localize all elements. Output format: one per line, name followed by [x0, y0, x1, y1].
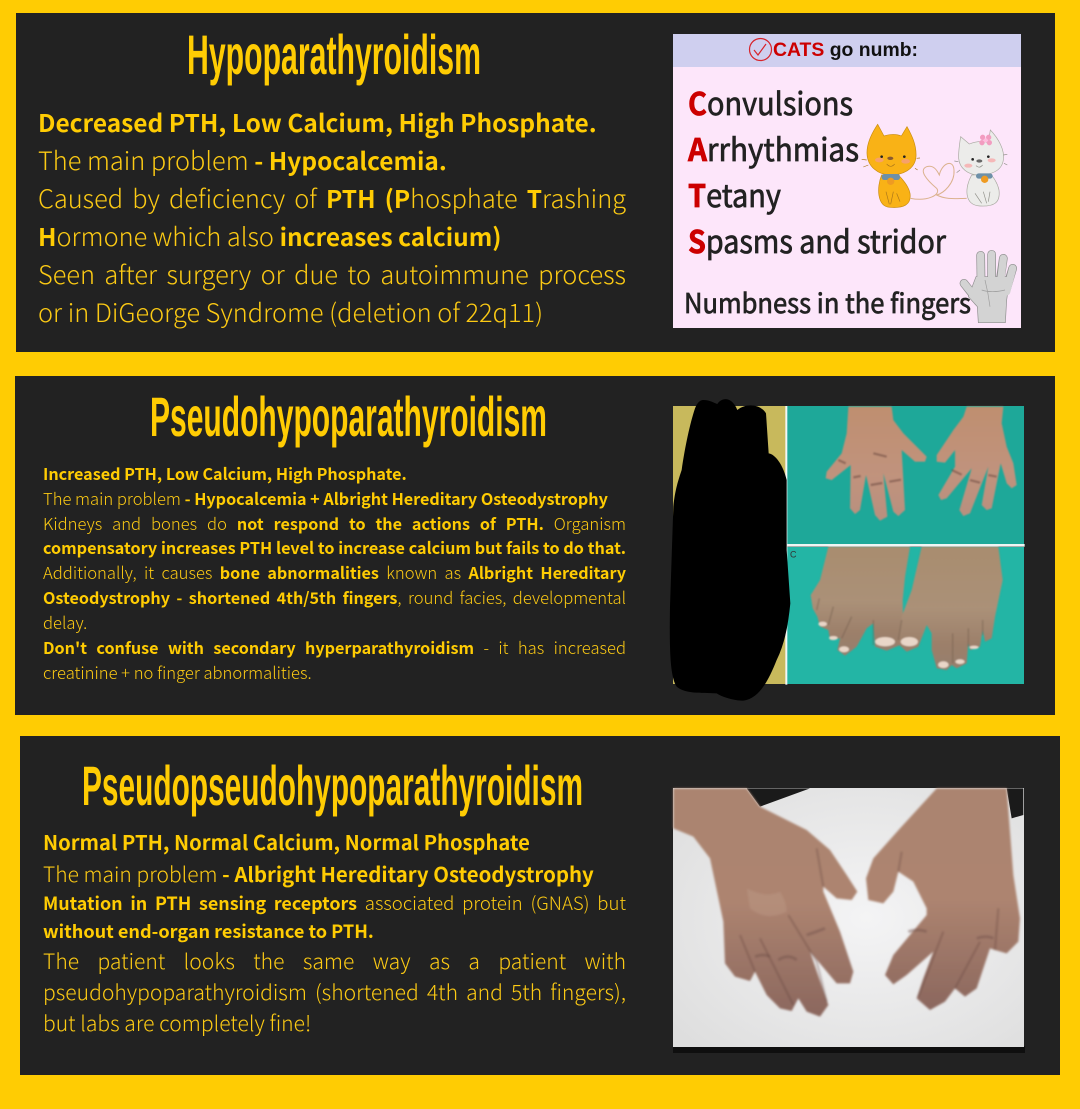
- text block: hypoparathyroidism description: Hormone which also increases calcium): [38, 218, 502, 254]
- card heading: CATS go numb:: [773, 40, 918, 61]
- text block: pseudohypoparathyroidism description: creatinine + no finger abnormalities.: [43, 660, 312, 684]
- mnemonic list: Spasms and stridor: [688, 217, 947, 262]
- mnemonic list: Arrhythmias: [687, 125, 859, 170]
- black redaction: [670, 399, 790, 701]
- text block: hypoparathyroidism description: or in DiGeorge Syndrome (deletion of 22q11): [38, 294, 543, 330]
- text block: hypoparathyroidism description: The main problem - Hypocalcemia.: [38, 142, 447, 178]
- text block: hypoparathyroidism description: Seen after surgery or due to autoimmune process: [38, 256, 626, 292]
- text block: pseudopseudohypoparathyroidism description: but labs are completely fine!: [43, 1008, 311, 1038]
- heading: Pseudopseudohypoparathyroidism: Pseudopseudohypoparathyroidism: [82, 754, 583, 817]
- mnemonic card: CATS go numb: [673, 34, 1021, 328]
- heading: Pseudohypoparathyroidism: Pseudohypoparathyroidism: [150, 385, 547, 448]
- text block: pseudohypoparathyroidism description: The main problem - Hypocalcemia + Albright Hereditary Osteodystrophy: [43, 486, 608, 510]
- mnemonic list: [684, 79, 971, 321]
- illustration: cats and hand: [862, 124, 1013, 323]
- text block: pseudopseudohypoparathyroidism description: Mutation in PTH sensing receptors associated protein (GNAS) but: [43, 889, 626, 916]
- text block: pseudohypoparathyroidism description: Kidneys and bones do not respond to the actions of PTH. Organism: [43, 511, 626, 535]
- text block: hypoparathyroidism description: Caused by deficiency of PTH (Phosphate Trashing: [38, 180, 626, 216]
- text block: pseudopseudohypoparathyroidism description: The patient looks the same way as a patient with: [43, 946, 626, 976]
- photo: hands and feet with redacted face: [670, 399, 1025, 701]
- panel: pseudopseudohypoparathyroidism: [20, 736, 1060, 1075]
- text block: pseudopseudohypoparathyroidism description: without end-organ resistance to PTH.: [43, 918, 374, 944]
- text block: pseudohypoparathyroidism description: Increased PTH, Low Calcium, High Phosphate.: [43, 461, 407, 485]
- text block: pseudohypoparathyroidism description: delay.: [43, 610, 87, 634]
- mnemonic list: Numbness in the fingers: [684, 282, 971, 321]
- text block: hypoparathyroidism description: Decreased PTH, Low Calcium, High Phosphate.: [38, 105, 597, 140]
- panel: pseudohypoparathyroidism: [15, 376, 1055, 715]
- text block: pseudohypoparathyroidism description: Additionally, it causes bone abnormalities known as Albright Hereditary: [43, 560, 626, 584]
- heading: Hypoparathyroidism: Hypoparathyroidism: [187, 23, 481, 86]
- text block: pseudopseudohypoparathyroidism description: pseudohypoparathyroidism (shortened 4th and 5th fingers),: [43, 977, 626, 1007]
- feet: [811, 547, 1003, 670]
- panel: hypoparathyroidism: [16, 13, 1055, 352]
- text block: pseudohypoparathyroidism description: Don't confuse with secondary hyperparathyroidism - it has increased: [43, 635, 626, 659]
- mnemonic list: Convulsions: [688, 79, 853, 124]
- text block: pseudopseudohypoparathyroidism description: Normal PTH, Normal Calcium, Normal Phosphate: [43, 827, 530, 856]
- text block: pseudohypoparathyroidism description: compensatory increases PTH level to increase calcium but fails to do that.: [43, 535, 626, 559]
- text block: pseudohypoparathyroidism description: Osteodystrophy - shortened 4th/5th fingers, round facies, developmental: [43, 585, 626, 609]
- mnemonic list: Tetany: [688, 171, 781, 216]
- text block: pseudopseudohypoparathyroidism description: The main problem - Albright Hereditary Osteodystrophy: [43, 858, 594, 889]
- icon: check circle: [750, 38, 772, 60]
- text: C: C: [790, 549, 797, 559]
- hands: [826, 407, 1017, 521]
